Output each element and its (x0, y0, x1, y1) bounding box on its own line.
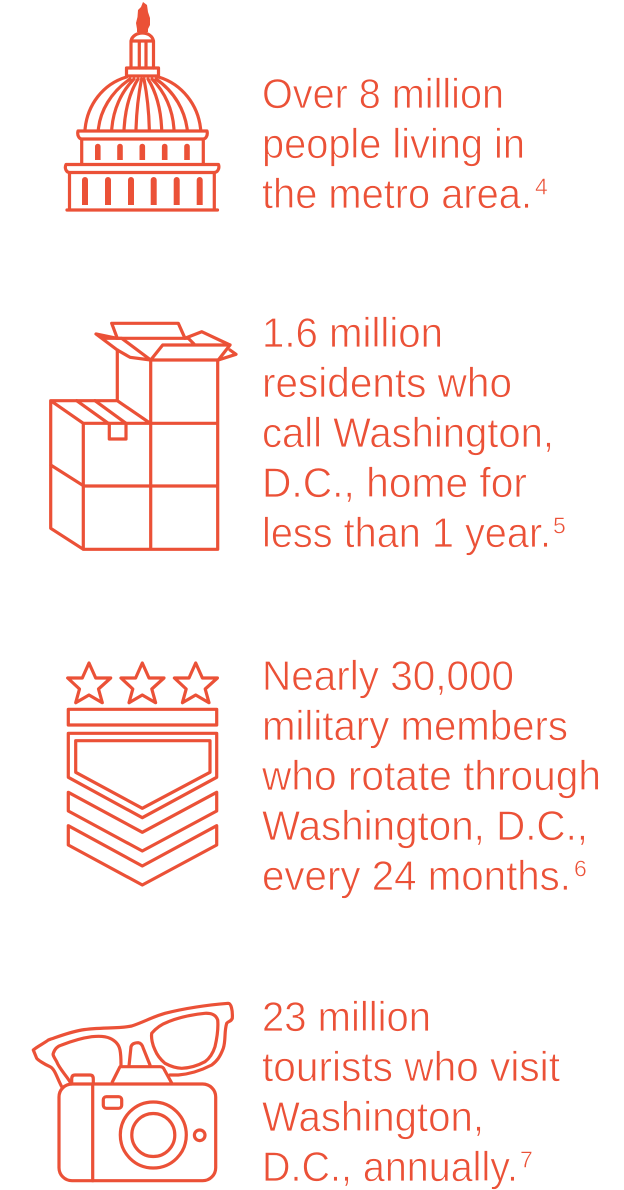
text: 23 million: D.C., annually. (262, 1143, 518, 1190)
panel: military members (68, 652, 601, 899)
text: nearly 30,000 (261, 652, 601, 899)
text: 1.6 million: D.C., home for (262, 459, 527, 506)
text: 1.6 million: residents who (262, 359, 512, 406)
text: nearly 30,000: Washington, D.C., (262, 802, 588, 849)
icon: military chevron badge (68, 663, 217, 885)
text: nearly 30,000: who rotate through (261, 752, 601, 799)
text: 23 million: 23 million (262, 993, 431, 1040)
panel: tourists (33, 993, 560, 1190)
text: 1.6 million: 1.6 million (262, 309, 443, 356)
text: over 8 million (262, 70, 548, 217)
text: nearly 30,000: every 24 months. (262, 852, 571, 899)
text: over 8 million: people living in (262, 120, 525, 167)
text: 1.6 million: less than 1 year. (262, 509, 551, 556)
text: 23 million (262, 993, 560, 1190)
text: over 8 million: Over 8 million (262, 70, 504, 117)
panel: new residents (51, 309, 566, 556)
text: nearly 30,000: 6 (574, 856, 587, 882)
panel: metro area population (65, 2, 548, 217)
text: 1.6 million: call Washington, (262, 409, 554, 456)
icon: moving boxes (51, 323, 236, 549)
text: 23 million: tourists who visit (262, 1043, 560, 1090)
text: 23 million: 7 (520, 1146, 533, 1172)
text: nearly 30,000: Nearly 30,000 (262, 652, 514, 699)
icon: capitol dome (65, 2, 219, 210)
text: nearly 30,000: military members (262, 702, 568, 749)
text: over 8 million: 4 (535, 174, 548, 200)
text: 23 million: Washington, (262, 1093, 484, 1140)
icon: camera and sunglasses (33, 1003, 232, 1181)
text: 1.6 million (262, 309, 566, 556)
text: 1.6 million: 5 (553, 512, 566, 538)
text: over 8 million: the metro area. (262, 170, 532, 217)
